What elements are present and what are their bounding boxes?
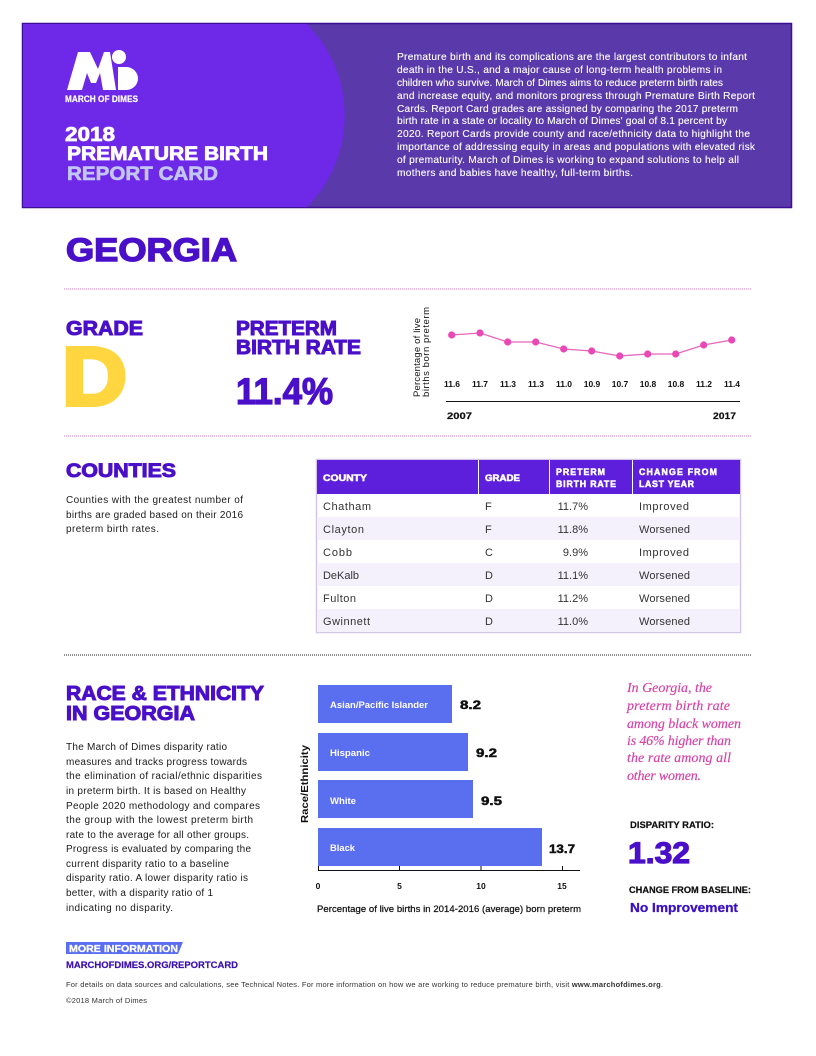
row: Clayton: Clayton bbox=[323, 524, 364, 536]
counties heading: COUNTIES bbox=[66, 460, 176, 482]
row: Chatham: Chatham bbox=[323, 501, 371, 513]
intro text block: mothers and babies have healthy, full-term births. bbox=[397, 168, 633, 179]
row: DeKalb: D bbox=[485, 570, 493, 582]
x axis bbox=[316, 866, 580, 891]
disparity ratio description: better, with a disparity ratio of 1 bbox=[66, 888, 213, 899]
row: Fulton: D bbox=[485, 593, 493, 605]
header purple circle panel bbox=[23, 24, 345, 207]
intro text block: birth rate in a state or locality to March of Dimes' goal of 8.1 percent by bbox=[397, 116, 728, 127]
report card title: PREMATURE BIRTH bbox=[67, 144, 268, 165]
x axis: 0 bbox=[316, 881, 321, 891]
callout: disparity quote: the rate among all bbox=[627, 751, 731, 766]
row: Gwinnett bbox=[323, 616, 690, 628]
line chart: preterm birth rate 2007 to 2017: 2007 bbox=[447, 411, 472, 422]
row: DeKalb: 11.1% bbox=[558, 570, 588, 582]
callout: disparity quote: other women. bbox=[627, 769, 701, 784]
chart value labels: 11.3 bbox=[528, 379, 544, 389]
disparity ratio stat: DISPARITY RATIO: bbox=[630, 820, 714, 830]
disparity ratio description: People 2020 methodology and compares bbox=[66, 801, 260, 812]
chart value labels: 11.6 bbox=[444, 379, 460, 389]
chart value labels: 11.3 bbox=[500, 379, 516, 389]
change from baseline stat: CHANGE FROM BASELINE: bbox=[629, 885, 751, 895]
row: Cobb: C bbox=[485, 547, 493, 559]
table header row bbox=[317, 460, 740, 494]
row: DeKalb bbox=[323, 570, 690, 582]
table header row: PRETERM bbox=[556, 467, 605, 477]
counties description: Counties with the greatest number of bbox=[66, 495, 243, 506]
grade panel: GRADE bbox=[66, 318, 143, 340]
report card title bbox=[65, 124, 268, 185]
row: Gwinnett: D bbox=[485, 616, 493, 628]
x axis title: Percentage of live births in 2014-2016 (average) born preterm bbox=[317, 904, 581, 915]
footnote: For details on data sources and calculations, see Technical Notes. For more information on how we are working to reduce premature birth, visit www.marchofdimes.org. bbox=[66, 980, 663, 989]
disparity ratio description: rate to the average for all other groups. bbox=[66, 830, 249, 841]
row: Chatham: F bbox=[485, 501, 492, 513]
bar: Hispanic: Hispanic bbox=[330, 748, 370, 758]
row: Fulton: 11.2% bbox=[558, 593, 588, 605]
preterm birth rate panel bbox=[236, 318, 361, 412]
intro text block: death in the U.S., and a major cause of long-term health problems in bbox=[397, 65, 722, 76]
row: Fulton: Fulton bbox=[323, 593, 356, 605]
chart value labels: 11.7 bbox=[472, 379, 488, 389]
row: Gwinnett: Gwinnett bbox=[323, 616, 370, 628]
chart value labels: 11.2 bbox=[696, 379, 712, 389]
icon: March of Dimes logo bbox=[65, 50, 138, 105]
table header row: CHANGE FROM bbox=[639, 467, 717, 477]
county table bbox=[316, 460, 740, 632]
report card title: REPORT CARD bbox=[67, 164, 218, 185]
race and ethnicity heading bbox=[66, 683, 265, 725]
row: Clayton: 11.8% bbox=[558, 524, 588, 536]
row: Cobb: Improved bbox=[639, 547, 689, 559]
chart value labels: 10.9 bbox=[584, 379, 601, 389]
intro text block: children who survive. March of Dimes aims to reduce preterm birth rates bbox=[397, 78, 723, 89]
intro text block: Premature birth and its complications are the largest contributors to infant bbox=[397, 52, 747, 63]
disparity ratio description: current disparity ratio to a baseline bbox=[66, 859, 229, 870]
counties description: preterm birth rates. bbox=[66, 524, 159, 535]
intro text block: Cards. Report Card grades are assigned by comparing the 2017 preterm bbox=[397, 104, 738, 115]
disparity ratio description: indicating no disparity. bbox=[66, 903, 173, 914]
more information tag: MORE INFORMATION bbox=[69, 944, 178, 955]
callout: disparity quote: is 46% higher than bbox=[627, 734, 731, 749]
bar: White: White bbox=[330, 796, 356, 806]
header banner bbox=[22, 24, 792, 208]
bar: Asian/Pacific Islander bbox=[318, 685, 481, 723]
disparity ratio description: the group with the lowest preterm birth bbox=[66, 815, 253, 826]
race and ethnicity heading: RACE & ETHNICITY bbox=[66, 683, 265, 705]
chart axis label: Percentage of live bbox=[412, 318, 423, 397]
disparity ratio description: measures and tracks progress towards bbox=[66, 757, 247, 768]
table header row: BIRTH RATE bbox=[556, 479, 616, 489]
change from baseline stat bbox=[629, 885, 751, 915]
disparity ratio value: 1.32 bbox=[628, 837, 690, 870]
callout: disparity quote: preterm birth rate bbox=[626, 699, 730, 714]
table header row: LAST YEAR bbox=[639, 479, 695, 489]
bar: Hispanic bbox=[318, 733, 497, 771]
bar: Asian/Pacific Islander: 8.2 bbox=[460, 698, 481, 712]
chart value labels: 10.7 bbox=[612, 379, 629, 389]
intro text block: and increase equity, and monitors progress through Premature Birth Report bbox=[397, 91, 755, 102]
callout: disparity quote: among black women bbox=[627, 717, 741, 732]
row: DeKalb: Worsened bbox=[639, 570, 690, 582]
copyright: ©2018 March of Dimes bbox=[66, 996, 147, 1005]
preterm rate value: 11.4% bbox=[236, 371, 333, 412]
counties description: births are graded based on their 2016 bbox=[66, 510, 243, 521]
preterm birth rate panel: PRETERM bbox=[236, 318, 337, 340]
report card URL: MARCHOFDIMES.ORG/REPORTCARD bbox=[66, 960, 238, 971]
bar: White bbox=[318, 780, 502, 818]
row: Chatham bbox=[323, 501, 689, 513]
row: Fulton: Worsened bbox=[639, 593, 690, 605]
disparity ratio description: The March of Dimes disparity ratio bbox=[66, 742, 227, 753]
bar: White: 9.5 bbox=[481, 794, 502, 808]
x axis: 5 bbox=[397, 881, 402, 891]
bar: Black: 13.7 bbox=[549, 842, 575, 856]
row: Clayton: Worsened bbox=[639, 524, 690, 536]
row: Chatham: 11.7% bbox=[558, 501, 588, 513]
row: Clayton bbox=[323, 524, 690, 536]
x axis: 10 bbox=[476, 881, 486, 891]
disparity ratio description: Progress is evaluated by comparing the bbox=[66, 844, 251, 855]
preterm birth rate panel: BIRTH RATE bbox=[236, 337, 361, 359]
grade panel bbox=[62, 318, 143, 423]
change from baseline stat: No Improvement bbox=[630, 900, 739, 915]
row: Cobb bbox=[323, 547, 689, 559]
x axis: 15 bbox=[557, 881, 567, 891]
row: Gwinnett: Worsened bbox=[639, 616, 690, 628]
chart axis label bbox=[412, 307, 432, 397]
report card title: 2018 bbox=[65, 124, 115, 146]
row: DeKalb: DeKalb bbox=[323, 570, 359, 582]
intro text block: of prematurity. March of Dimes is working to expand solutions to help all bbox=[397, 155, 739, 166]
icon: March of Dimes logo: MARCH OF DIMES bbox=[65, 94, 138, 105]
bar: Black bbox=[318, 828, 575, 866]
disparity ratio description bbox=[66, 742, 262, 914]
row: Fulton bbox=[323, 593, 690, 605]
disparity ratio description: in preterm birth. It is based on Healthy bbox=[66, 786, 246, 797]
chart value labels bbox=[444, 379, 740, 389]
table header row: COUNTY bbox=[323, 473, 367, 483]
grade letter: D bbox=[62, 330, 127, 423]
disparity ratio stat bbox=[628, 820, 714, 870]
chart value labels: 11.4 bbox=[724, 379, 740, 389]
bar: Hispanic: 9.2 bbox=[476, 746, 497, 760]
line chart: preterm birth rate 2007 to 2017: 2017 bbox=[713, 411, 736, 422]
line chart: preterm birth rate 2007 to 2017 bbox=[412, 307, 740, 422]
disparity ratio description: the elimination of racial/ethnic disparities bbox=[66, 771, 262, 782]
intro text block: importance of addressing equity in areas and populations with elevated risk bbox=[397, 142, 756, 153]
counties description bbox=[66, 495, 243, 535]
intro text block: 2020. Report Cards provide county and race/ethnicity data to highlight the bbox=[397, 129, 750, 140]
bar: Black: Black bbox=[330, 843, 356, 853]
row: Clayton: F bbox=[485, 524, 492, 536]
row: Cobb: 9.9% bbox=[563, 547, 588, 559]
bar chart: race and ethnicity bbox=[300, 685, 581, 915]
race and ethnicity heading: IN GEORGIA bbox=[66, 703, 195, 725]
chart axis label: births born preterm bbox=[421, 307, 432, 397]
disparity ratio description: disparity ratio. A lower disparity ratio is bbox=[66, 873, 248, 884]
bar: Asian/Pacific Islander: Asian/Pacific Islander bbox=[330, 700, 429, 710]
chart value labels: 10.8 bbox=[668, 379, 685, 389]
callout: disparity quote: In Georgia, the bbox=[626, 681, 712, 696]
callout: disparity quote bbox=[626, 681, 741, 784]
row: Cobb: Cobb bbox=[323, 547, 352, 559]
row: Chatham: Improved bbox=[639, 501, 689, 513]
table header row: GRADE bbox=[485, 473, 520, 483]
row: Gwinnett: 11.0% bbox=[558, 616, 588, 628]
chart value labels: 11.0 bbox=[556, 379, 572, 389]
y axis title: Race/Ethnicity bbox=[300, 745, 311, 823]
state heading: GEORGIA bbox=[66, 232, 237, 268]
intro text block bbox=[397, 52, 756, 179]
chart value labels: 10.8 bbox=[640, 379, 657, 389]
